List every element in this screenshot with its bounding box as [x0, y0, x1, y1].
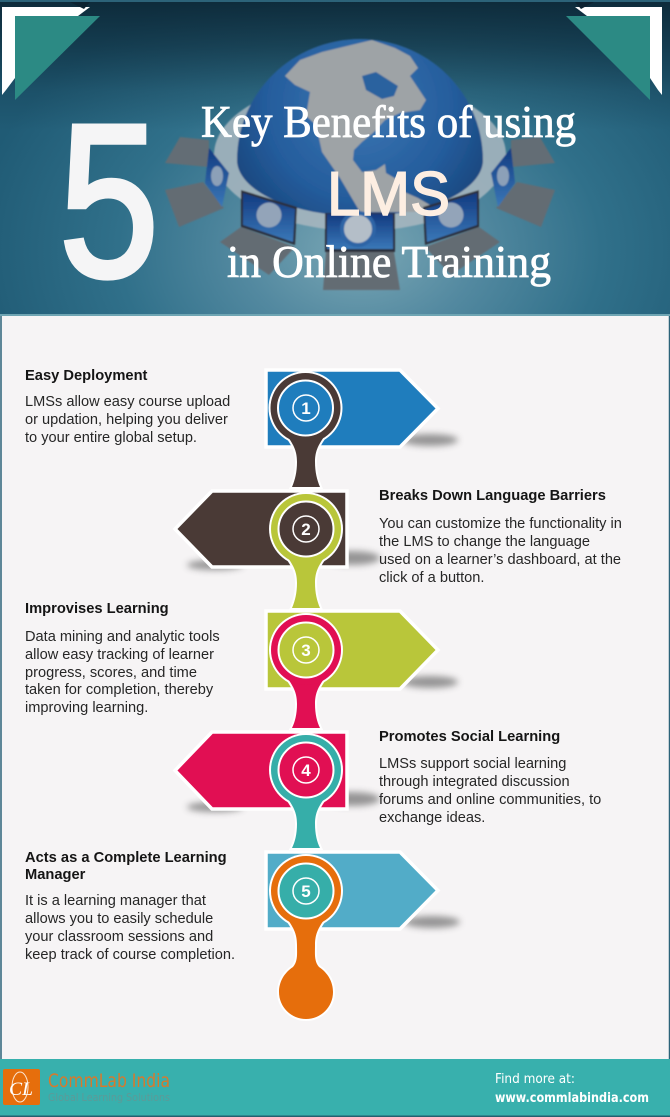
side laptops	[165, 182, 224, 227]
text block: Acts as a Complete Learning Manager: It is a learning manager that	[25, 893, 206, 909]
big numeral 5: 5	[59, 80, 159, 323]
text block: Breaks Down Language Barriers: click of a button.	[379, 570, 484, 586]
text block: Improvises Learning: allow easy tracking of learner	[25, 647, 214, 663]
step 1: arrow, marker and stem: 1	[301, 399, 311, 418]
text block: Improvises Learning: improving learning.	[25, 700, 148, 716]
title: line 3: in Online Training	[227, 237, 551, 287]
illustration: globe and laptops	[165, 39, 555, 290]
step 3: arrow, marker and stem	[266, 611, 458, 728]
text block: Easy Deployment	[25, 368, 230, 446]
text block: Breaks Down Language Barriers	[379, 488, 622, 586]
text block: Promotes Social Learning: Promotes Social Learning	[379, 729, 560, 745]
text block: Breaks Down Language Barriers: You can customize the functionality in	[379, 516, 622, 532]
text block: Easy Deployment: Easy Deployment	[25, 368, 148, 384]
text block: Acts as a Complete Learning Manager	[25, 850, 235, 963]
text block: Easy Deployment: LMSs allow easy course upload	[25, 394, 230, 410]
icon: CommLab logo	[3, 1069, 40, 1105]
step 5: arrow, marker and end blob	[266, 852, 460, 1019]
text block: Acts as a Complete Learning Manager: allows you to easily schedule	[25, 911, 213, 927]
text block: Improvises Learning: Improvises Learning	[25, 601, 169, 617]
company tagline: Global Learning Solutions	[48, 1092, 170, 1104]
step 5: arrow, marker and end blob: 5	[301, 882, 311, 901]
text block: Promotes Social Learning: exchange ideas.	[379, 810, 485, 826]
text block: Breaks Down Language Barriers: the LMS to change the language	[379, 534, 590, 550]
text block: Improvises Learning	[25, 601, 220, 716]
text block: Improvises Learning: taken for completion, thereby	[25, 682, 214, 698]
text block: Promotes Social Learning: LMSs support social learning	[379, 756, 566, 772]
text block: Improvises Learning: Data mining and analytic tools	[25, 629, 220, 645]
text block: Easy Deployment: or updation, helping you deliver	[25, 412, 228, 428]
text block: Easy Deployment: to your entire global setup.	[25, 430, 197, 446]
title: line 1: Key Benefits of using	[201, 97, 576, 147]
step 2: arrow, marker and stem: 2	[301, 520, 311, 539]
title: LMS: LMS	[327, 160, 450, 229]
icon: CommLab logo: CL	[9, 1079, 33, 1100]
text block: Breaks Down Language Barriers: Breaks Down Language Barriers	[379, 488, 606, 504]
text block: Breaks Down Language Barriers: used on a learner’s dashboard, at the	[379, 552, 621, 568]
globe	[237, 39, 483, 216]
footer bar	[0, 1059, 670, 1117]
text block: Acts as a Complete Learning Manager: your classroom sessions and	[25, 929, 213, 945]
header banner	[0, 0, 670, 323]
text block: Promotes Social Learning	[379, 729, 601, 826]
text block: Acts as a Complete Learning Manager: Acts as a Complete Learning	[25, 850, 227, 866]
text block: Promotes Social Learning: through integrated discussion	[379, 774, 570, 790]
find more label: Find more at:	[495, 1071, 575, 1087]
company name: CommLab India	[48, 1070, 170, 1092]
step 4: arrow, marker and stem: 4	[301, 761, 311, 780]
text block: Promotes Social Learning: forums and online communities, to	[379, 792, 601, 808]
step 1: arrow, marker and stem	[266, 370, 458, 487]
text block: Improvises Learning: progress, scores, and time	[25, 665, 197, 681]
back laptops	[165, 137, 209, 167]
step 3: arrow, marker and stem: 3	[301, 641, 311, 660]
step 4: arrow, marker and stem	[175, 732, 380, 848]
text block: Acts as a Complete Learning Manager: keep track of course completion.	[25, 947, 235, 963]
centre laptop	[323, 252, 400, 290]
step 2: arrow, marker and stem	[175, 491, 380, 608]
text block: Acts as a Complete Learning Manager: Manager	[25, 867, 86, 883]
front side laptops	[220, 227, 295, 275]
corner ribbon: right	[566, 2, 662, 100]
corner ribbon: left	[2, 2, 100, 100]
land	[285, 40, 430, 212]
